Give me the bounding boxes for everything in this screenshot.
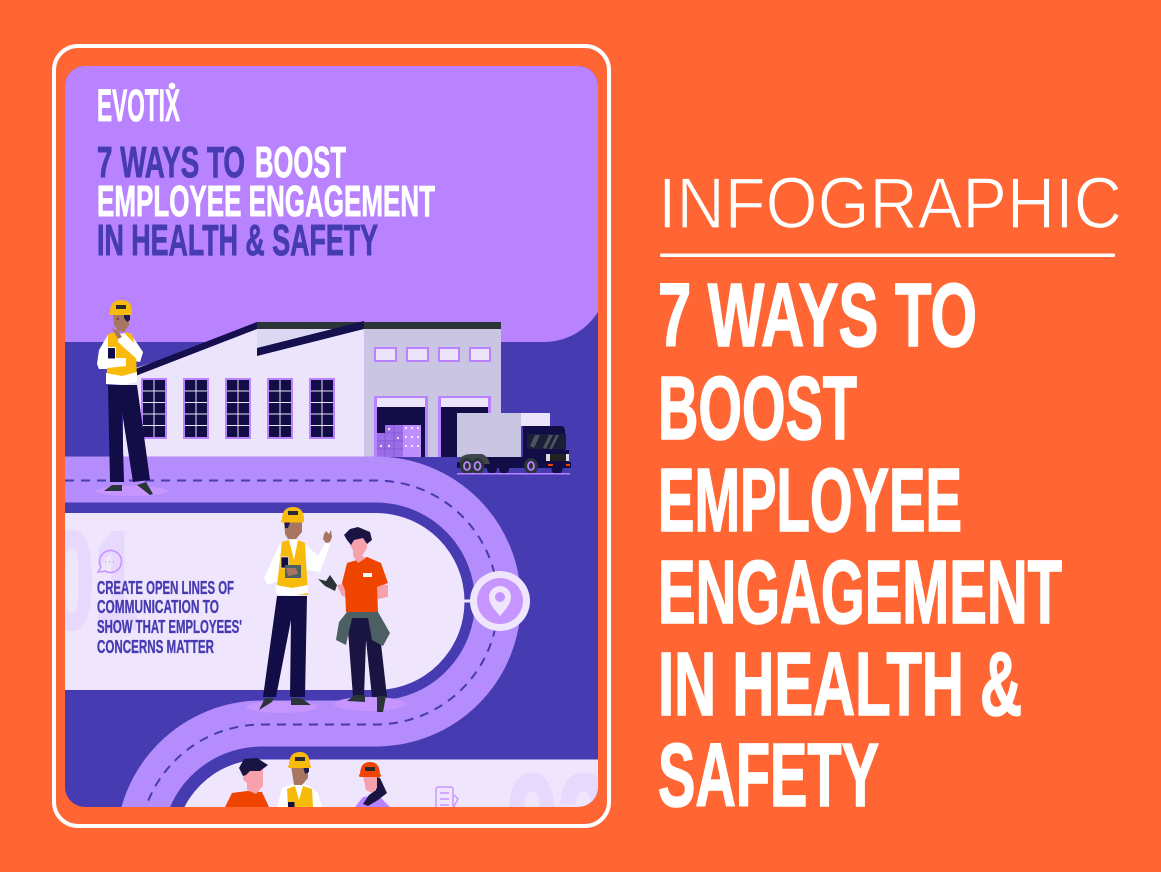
main heading: SAFETY	[658, 726, 879, 826]
main heading: BOOST	[658, 359, 857, 459]
illustration: warehouse	[123, 321, 501, 457]
panel: infographic preview	[65, 66, 598, 807]
panel heading	[98, 146, 435, 256]
section 01 text: SHOW THAT EMPLOYEES'	[97, 617, 242, 637]
icon: map pin	[470, 571, 530, 631]
main heading: 7 WAYS TO	[658, 266, 977, 366]
ghost number 01: 01	[50, 504, 138, 658]
main heading: EMPLOYEE	[658, 451, 962, 551]
preview frame	[54, 46, 609, 826]
logo: Evotix	[98, 82, 180, 122]
connector to map pin	[464, 600, 470, 602]
main heading	[658, 266, 1062, 826]
panel heading: BOOST	[255, 138, 346, 187]
section 01 background pill	[65, 513, 464, 690]
panel heading: 7 WAYS TO	[97, 138, 245, 187]
illustration: worker with tablet	[246, 507, 332, 713]
section 01 text: CONCERNS MATTER	[97, 637, 214, 657]
label: INFOGRAPHIC: INFOGRAPHIC	[658, 164, 1122, 244]
panel heading: IN HEALTH & SAFETY	[97, 216, 378, 265]
section 02 background pill	[184, 760, 598, 807]
road	[60, 480, 498, 846]
section 01 text: CREATE OPEN LINES OF	[97, 578, 234, 598]
top purple header area	[65, 66, 598, 342]
icon: clipboard	[435, 786, 459, 807]
illustration: team of three workers	[225, 752, 390, 807]
illustration: thinking safety worker	[96, 300, 168, 496]
icon: speech bubble	[98, 550, 122, 572]
illustration: truck	[457, 413, 571, 474]
illustration: worker in orange shirt	[318, 527, 406, 712]
panel heading: EMPLOYEE ENGAGEMENT	[97, 177, 435, 226]
section 01 text	[97, 578, 242, 657]
section 01 text: COMMUNICATION TO	[97, 597, 219, 617]
heading divider	[660, 254, 1115, 257]
logo: Evotix: EVOTIX	[97, 80, 180, 131]
